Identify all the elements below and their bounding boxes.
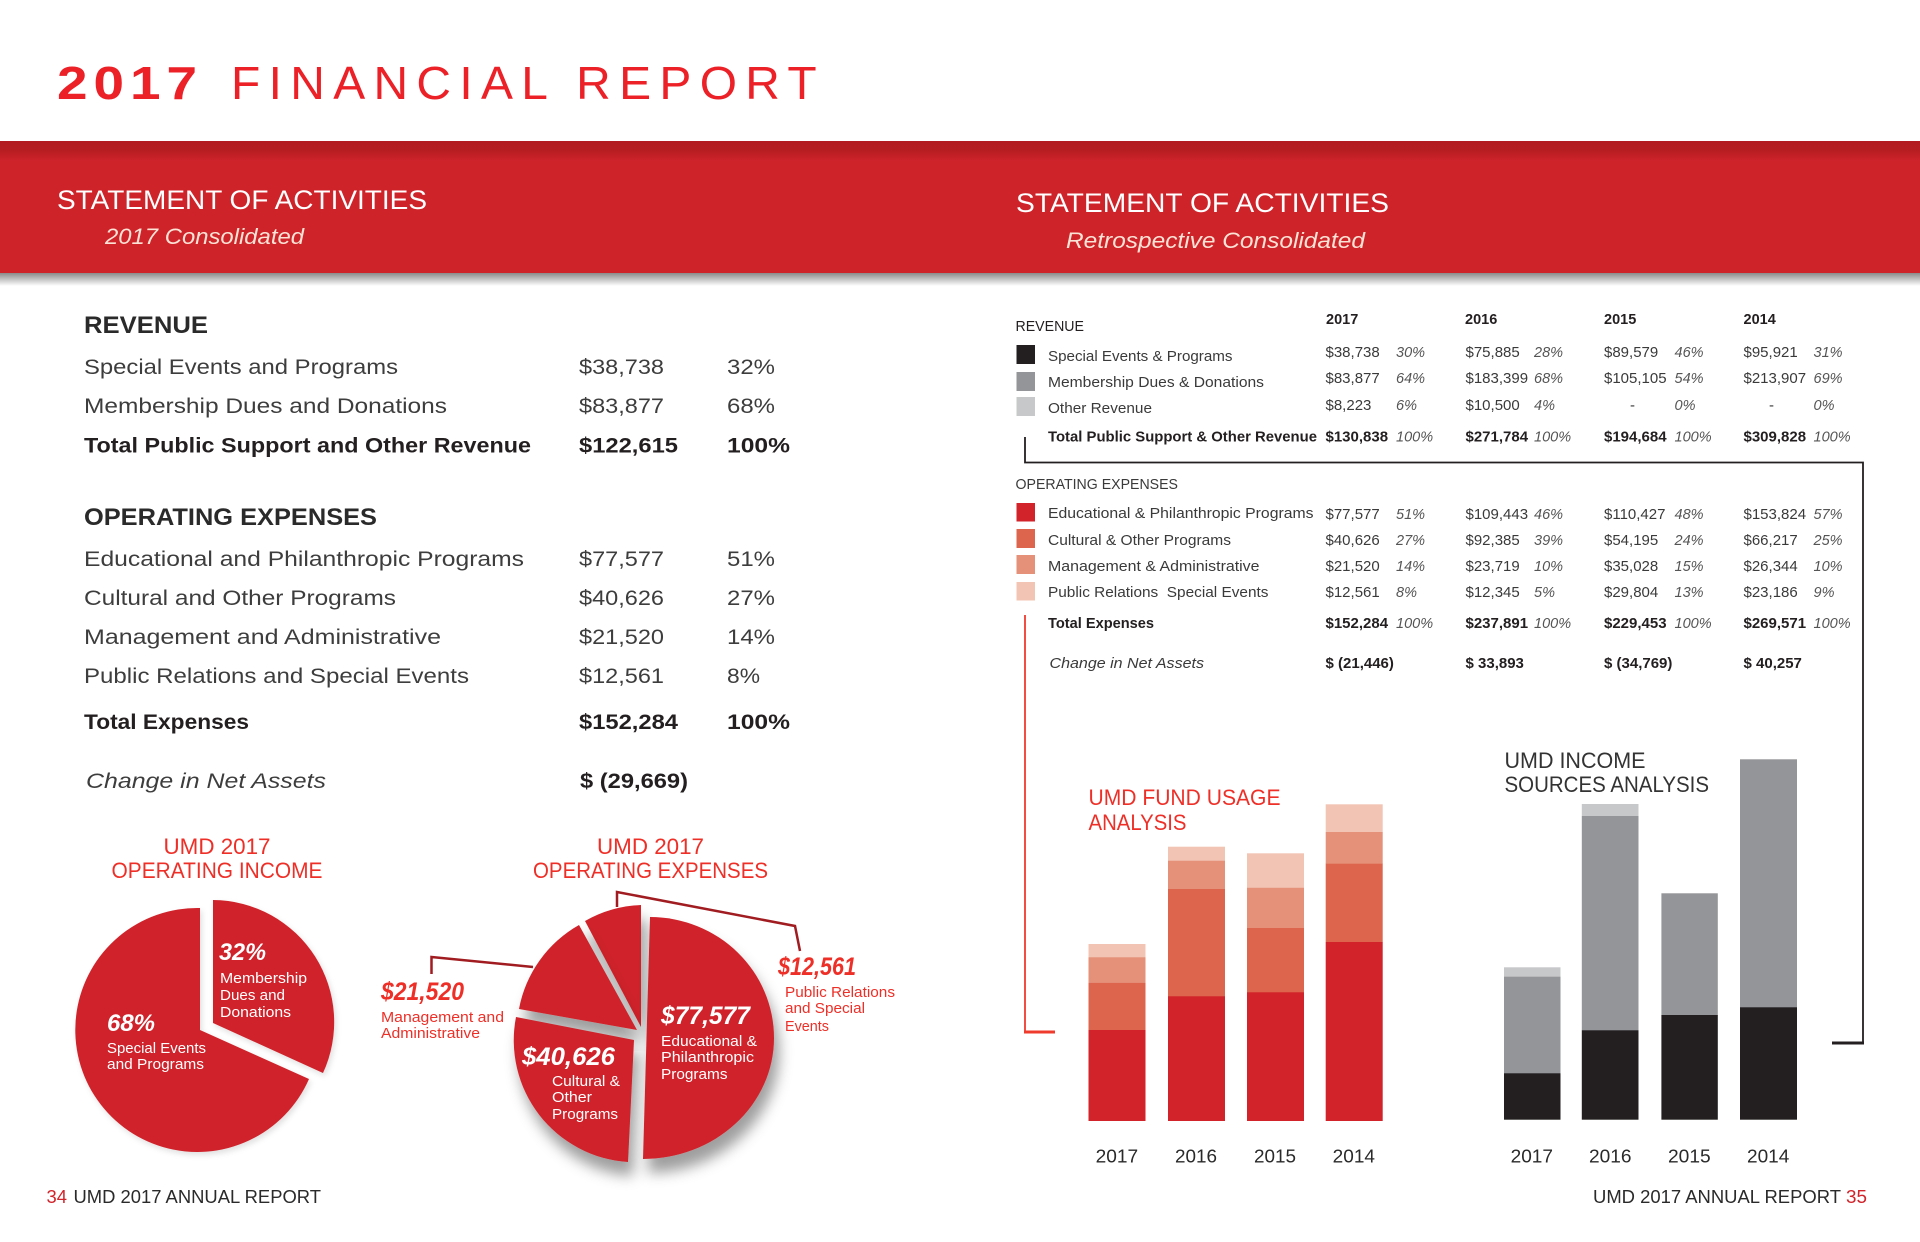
- row: change in net assets: $ (21,446): [1326, 655, 1394, 672]
- row: public relations: 13%: [1674, 585, 1704, 601]
- chart heading: fund usage: UMD FUND USAGE: [1088, 785, 1280, 810]
- slice: management: [519, 925, 637, 1030]
- heading: statement of activities 2017 consolidated: [57, 185, 427, 249]
- panel: 2017 operating expenses table: Cultural and Other Programs: [84, 586, 396, 610]
- slice label: educational: $77,577: [660, 1002, 751, 1030]
- row: educational: 46%: [1534, 507, 1563, 523]
- slice label: cultural: $40,626: [521, 1043, 616, 1071]
- year header row: 2017: [1326, 312, 1358, 328]
- row: membership: $83,877: [1326, 370, 1380, 387]
- callout: public relations: [777, 953, 895, 1035]
- panel: 2017 operating expenses table: $21,520: [579, 625, 664, 649]
- row: total revenue: Total Public Support & Other Revenue: [1048, 428, 1317, 446]
- row: educational: $153,824: [1744, 506, 1806, 523]
- leader line: management: [432, 957, 533, 974]
- footer left: UMD 2017 ANNUAL REPORT: [74, 1187, 321, 1207]
- callout: public relations: Public Relations: [785, 984, 895, 1001]
- bar: 2015: [1661, 893, 1718, 1120]
- panel: 2017 revenue table: $122,615: [579, 434, 678, 458]
- row: total revenue: 100%: [1674, 430, 1712, 446]
- chart heading: income sources: SOURCES ANALYSIS: [1504, 772, 1709, 797]
- row: cultural: 25%: [1812, 533, 1843, 549]
- row: special events: [1016, 344, 1843, 365]
- row: special events: 28%: [1533, 345, 1563, 361]
- row: total expenses: $152,284: [1326, 615, 1389, 632]
- pie heading: operating expenses: OPERATING EXPENSES: [533, 858, 768, 883]
- row: educational: 48%: [1674, 507, 1704, 523]
- row: cultural: 27%: [1395, 533, 1425, 549]
- axis labels: income sources: 2017: [1511, 1146, 1553, 1167]
- row: total expenses: 100%: [1534, 616, 1571, 632]
- row: change in net assets: $ 33,893: [1466, 655, 1524, 672]
- chart heading: fund usage: [1088, 785, 1280, 835]
- chart heading: income sources: [1504, 748, 1709, 797]
- row: cultural: $92,385: [1466, 532, 1520, 549]
- pie heading: operating expenses: [533, 834, 768, 883]
- axis labels: fund usage: 2017: [1096, 1146, 1138, 1167]
- panel: 2017 operating expenses table: Change in Net Assets: [86, 769, 326, 793]
- pie heading: operating expenses: UMD 2017: [597, 834, 704, 859]
- title: 2017: [57, 57, 203, 109]
- row: total revenue: $271,784: [1466, 428, 1529, 446]
- slice label: cultural: Cultural &: [552, 1073, 620, 1090]
- row: special events: Special Events & Programs: [1048, 349, 1232, 365]
- row: change in net assets: Change in Net Assets: [1050, 656, 1204, 672]
- row: total revenue: 100%: [1396, 430, 1433, 446]
- row: public relations: $29,804: [1604, 584, 1658, 601]
- row: membership: 69%: [1814, 371, 1843, 387]
- leader line: public relations: [617, 892, 800, 951]
- slice: educational: [643, 917, 774, 1159]
- axis labels: income sources: 2016: [1589, 1146, 1632, 1167]
- slice label: special events: Special Events: [107, 1040, 206, 1057]
- row: management: 10%: [1814, 559, 1843, 575]
- slice label: cultural: Other: [552, 1089, 592, 1106]
- row: educational: Educational & Philanthropic Programs: [1048, 506, 1314, 522]
- slice label: educational: [660, 1002, 757, 1083]
- panel: 2017 revenue table: [84, 312, 790, 458]
- row: cultural: $54,195: [1604, 532, 1658, 549]
- row: public relations: $12,345: [1466, 584, 1520, 601]
- row: total revenue: [1048, 428, 1851, 446]
- row: public relations: 8%: [1396, 585, 1417, 601]
- chart heading: fund usage: ANALYSIS: [1088, 810, 1186, 835]
- row: management: [1016, 555, 1843, 575]
- row: total expenses: 100%: [1674, 616, 1712, 632]
- slice label: cultural: Programs: [552, 1106, 618, 1123]
- axis labels: fund usage: 2016: [1175, 1146, 1217, 1167]
- panel: 2017 revenue table: Membership Dues and Donations: [84, 394, 447, 418]
- year header row: [1326, 312, 1776, 328]
- row: membership: $105,105: [1604, 370, 1667, 387]
- row: membership: Membership Dues & Donations: [1048, 375, 1264, 391]
- row: cultural: $40,626: [1326, 532, 1380, 549]
- chart heading: income sources: UMD INCOME: [1504, 748, 1646, 773]
- row: membership: 54%: [1674, 371, 1704, 387]
- row: public relations: $12,561: [1326, 584, 1380, 601]
- panel: 2017 operating expenses table: $12,561: [579, 664, 664, 688]
- axis labels: fund usage: 2014: [1333, 1146, 1375, 1167]
- panel: 2017 operating expenses table: $40,626: [579, 586, 664, 610]
- row: management: $23,719: [1466, 558, 1520, 575]
- callout: management: Management and: [381, 1009, 504, 1026]
- slice label: educational: Programs: [661, 1066, 728, 1083]
- year header row: 2016: [1465, 312, 1497, 328]
- panel: 2017 revenue table: $83,877: [579, 394, 664, 418]
- footer right: 35: [1846, 1187, 1867, 1207]
- year header row: 2014: [1744, 312, 1776, 328]
- callout: public relations: $12,561: [777, 953, 856, 981]
- panel: 2017 revenue table: 100%: [727, 434, 790, 458]
- row: total expenses: [1048, 615, 1851, 632]
- bar: 2016: [1582, 804, 1638, 1120]
- panel: 2017 operating expenses table: Management and Administrative: [84, 625, 441, 649]
- row: cultural: 24%: [1674, 533, 1704, 549]
- bar: 2014: [1326, 804, 1383, 1121]
- slice: membership 32%: [213, 900, 334, 1073]
- slice label: special events: 68%: [107, 1010, 155, 1037]
- row: educational: 57%: [1814, 507, 1843, 523]
- row: total expenses: 100%: [1814, 616, 1851, 632]
- slice: special events 68%: [75, 908, 309, 1152]
- row: total expenses: Total Expenses: [1048, 615, 1154, 632]
- row: management: Management & Administrative: [1048, 559, 1260, 575]
- callout: public relations: and Special: [785, 1000, 865, 1017]
- pie heading: operating income: OPERATING INCOME: [112, 858, 322, 883]
- callout: management: $21,520: [380, 978, 464, 1006]
- slice label: special events: [107, 1010, 206, 1073]
- pie chart: operating expenses: [380, 834, 895, 1162]
- row: total expenses: 100%: [1396, 616, 1433, 632]
- row: total revenue: $130,838: [1326, 428, 1388, 446]
- panel: 2017 operating expenses table: OPERATING EXPENSES: [84, 504, 377, 531]
- bar: 2015: [1247, 853, 1304, 1121]
- row: public relations: $23,186: [1744, 584, 1798, 601]
- row: membership: $183,399: [1466, 370, 1528, 387]
- axis labels: fund usage: 2015: [1254, 1146, 1296, 1167]
- callout: management: Administrative: [381, 1025, 480, 1042]
- row: management: 14%: [1396, 559, 1425, 575]
- row: other revenue: Other Revenue: [1048, 401, 1152, 417]
- row: other revenue: 0%: [1814, 398, 1835, 414]
- panel: 2017 operating expenses table: Educational and Philanthropic Programs: [84, 547, 524, 571]
- slice: public relations: [585, 905, 641, 1027]
- row: management: $35,028: [1604, 558, 1658, 575]
- row: other revenue: [1016, 397, 1835, 417]
- slice label: membership: Donations: [220, 1004, 291, 1021]
- axis labels: income sources: [1511, 1146, 1789, 1167]
- panel: 2017 revenue table: Special Events and Programs: [84, 355, 398, 379]
- row: special events: 46%: [1674, 345, 1704, 361]
- panel: 2017 operating expenses table: $152,284: [579, 710, 678, 734]
- panel: 2017 operating expenses table: [84, 504, 790, 793]
- heading: statement of activities retrospective consolidated: [1016, 188, 1389, 253]
- bar: 2014: [1740, 759, 1797, 1120]
- row: other revenue: $10,500: [1466, 397, 1520, 414]
- slice label: membership: [219, 939, 307, 1021]
- slice label: educational: Philanthropic: [661, 1049, 755, 1066]
- row: membership: 64%: [1396, 371, 1425, 387]
- row: educational: [1016, 503, 1843, 523]
- row: special events: 30%: [1396, 345, 1425, 361]
- row: cultural: Cultural & Other Programs: [1048, 533, 1231, 549]
- panel: 2017 operating expenses table: 8%: [727, 664, 760, 688]
- bar: 2017: [1504, 967, 1560, 1120]
- axis labels: income sources: 2014: [1747, 1146, 1789, 1167]
- panel: 2017 revenue table: REVENUE: [84, 312, 208, 339]
- callout: public relations: Events: [785, 1018, 829, 1035]
- row: management: $26,344: [1744, 558, 1798, 575]
- heading: statement of activities retrospective consolidated: STATEMENT OF ACTIVITIES: [1016, 188, 1389, 218]
- row: public relations: 5%: [1534, 585, 1555, 601]
- row: other revenue: -: [1630, 397, 1635, 414]
- callout: management: [380, 978, 504, 1042]
- panel: 2017 operating expenses table: 14%: [727, 625, 775, 649]
- heading: statement of activities 2017 consolidated: STATEMENT OF ACTIVITIES: [57, 185, 427, 215]
- row: membership: 68%: [1534, 371, 1563, 387]
- row: special events: $89,579: [1604, 344, 1658, 361]
- panel: 2017 operating expenses table: $ (29,669): [580, 769, 688, 793]
- footer right: UMD 2017 ANNUAL REPORT: [1593, 1187, 1841, 1207]
- footer left: 34: [46, 1187, 67, 1207]
- row: special events: $75,885: [1466, 344, 1520, 361]
- row: total revenue: $194,684: [1604, 428, 1667, 446]
- bar chart: fund usage: [1088, 785, 1383, 1167]
- red header band: [0, 141, 1920, 286]
- row: public relations: 9%: [1814, 585, 1835, 601]
- slice label: membership: 32%: [219, 939, 266, 966]
- panel: 2017 operating expenses table: 100%: [727, 710, 790, 734]
- bar chart: income sources: [1504, 748, 1797, 1167]
- pie heading: operating income: [112, 834, 322, 883]
- pie chart: operating income: [75, 834, 334, 1152]
- row: management: $21,520: [1326, 558, 1380, 575]
- row: cultural: 39%: [1534, 533, 1563, 549]
- axis labels: fund usage: [1096, 1146, 1375, 1167]
- row: total expenses: $229,453: [1604, 615, 1667, 632]
- row: public relations: [1016, 582, 1835, 601]
- row: other revenue: -: [1769, 397, 1774, 414]
- row: other revenue: 6%: [1396, 398, 1417, 414]
- operating expenses subheading: OPERATING EXPENSES: [1016, 477, 1178, 493]
- row: cultural: $66,217: [1744, 532, 1798, 549]
- connector: fund usage bracket: [1024, 615, 1055, 1032]
- row: other revenue: $8,223: [1326, 397, 1371, 414]
- row: management: 10%: [1534, 559, 1563, 575]
- panel: 2017 operating expenses table: Public Relations and Special Events: [84, 664, 469, 688]
- axis labels: income sources: 2015: [1668, 1146, 1711, 1167]
- heading: statement of activities retrospective consolidated: Retrospective Consolidated: [1066, 228, 1366, 253]
- row: total expenses: $237,891: [1466, 615, 1528, 632]
- slice label: educational: Educational &: [661, 1033, 757, 1050]
- row: membership: [1016, 370, 1843, 391]
- row: total revenue: 100%: [1814, 430, 1851, 446]
- row: change in net assets: $ 40,257: [1744, 655, 1802, 672]
- slice label: special events: and Programs: [107, 1056, 204, 1073]
- panel: 2017 operating expenses table: 27%: [727, 586, 775, 610]
- panel: retrospective table: [1016, 312, 1851, 672]
- panel: 2017 revenue table: Total Public Support and Other Revenue: [84, 434, 531, 458]
- panel: 2017 revenue table: $38,738: [579, 355, 664, 379]
- panel: 2017 revenue table: 32%: [727, 355, 775, 379]
- row: special events: $95,921: [1744, 344, 1798, 361]
- row: special events: 31%: [1814, 345, 1843, 361]
- row: other revenue: 4%: [1534, 398, 1555, 414]
- row: special events: $38,738: [1326, 344, 1380, 361]
- row: other revenue: 0%: [1674, 398, 1696, 414]
- slice: cultural: [514, 1017, 634, 1162]
- slice label: membership: Membership: [220, 970, 307, 987]
- panel: 2017 operating expenses table: $77,577: [579, 547, 664, 571]
- row: membership: $213,907: [1744, 370, 1806, 387]
- row: total revenue: 100%: [1534, 430, 1571, 446]
- slice label: membership: Dues and: [220, 987, 285, 1004]
- row: educational: $77,577: [1326, 506, 1380, 523]
- row: public relations: Public Relations Special Events: [1048, 585, 1268, 601]
- row: change in net assets: [1050, 655, 1802, 672]
- row: total expenses: $269,571: [1744, 615, 1806, 632]
- year header row: 2015: [1604, 312, 1636, 328]
- row: change in net assets: $ (34,769): [1604, 655, 1672, 672]
- row: total revenue: $309,828: [1744, 428, 1806, 446]
- connector: income bracket: [1025, 437, 1864, 1043]
- row: educational: $110,427: [1604, 506, 1665, 523]
- row: cultural: [1016, 529, 1843, 549]
- bar: 2016: [1168, 847, 1225, 1121]
- row: management: 15%: [1674, 559, 1704, 575]
- panel: 2017 operating expenses table: Total Expenses: [84, 710, 249, 734]
- panel: 2017 operating expenses table: 51%: [727, 547, 775, 571]
- heading: statement of activities 2017 consolidated: 2017 Consolidated: [104, 224, 305, 249]
- pie heading: operating income: UMD 2017: [164, 834, 270, 859]
- title: FINANCIAL REPORT: [231, 57, 825, 109]
- row: educational: 51%: [1396, 507, 1425, 523]
- revenue subheading: REVENUE: [1016, 319, 1084, 335]
- slice label: cultural: [521, 1043, 620, 1123]
- bar: 2017: [1088, 944, 1146, 1121]
- panel: 2017 revenue table: 68%: [727, 394, 775, 418]
- row: educational: $109,443: [1466, 506, 1528, 523]
